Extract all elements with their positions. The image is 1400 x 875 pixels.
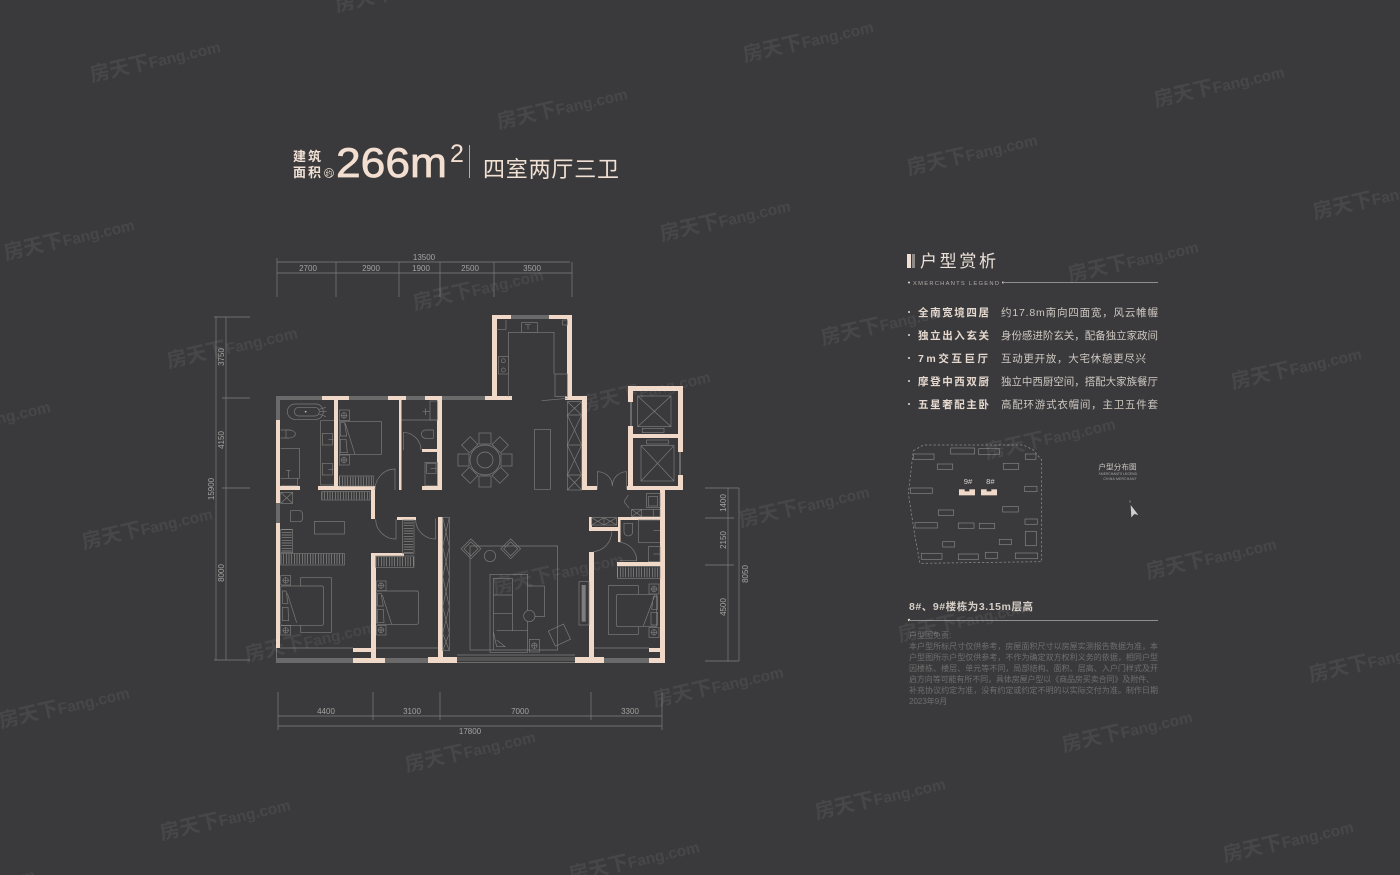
site buildings [910,448,1038,560]
feature list: 互动更开放，大宅休憩更尽兴 [1001,352,1146,365]
highlighted buildings 9# and 8#: 9# [964,477,973,486]
icon: bathtub [287,404,327,419]
dimension lines: left: 15900 [207,477,216,500]
dimension lines: right [705,488,750,661]
dimension lines: bottom: 7000 [511,707,529,716]
feature list: 身份感进阶玄关，配备独立家政间 [1001,329,1158,342]
dimension lines: top: 1900 [412,264,430,273]
watermarks: 房天下Fang.com [243,614,378,667]
watermarks: 房天下Fang.com [983,411,1118,464]
furniture: master bath and north bedroom [281,401,437,500]
dimension lines: right: 4500 [719,598,728,616]
subheading with rule: XMERCHANTS LEGEND [913,281,999,287]
furniture: living room and east suite [461,493,660,652]
dining island [534,429,551,489]
feature list: 摩登中西双厨 [918,375,990,388]
map legend: CHINA MERCHANT [1103,477,1137,481]
map legend: 户型分布图 [1098,461,1137,471]
title: area and layout: 266m [336,139,447,186]
feature list: 全南宽境四居 [918,306,989,319]
highlighted buildings 9# and 8# [959,477,997,495]
site distribution map [908,445,1138,563]
lift shaft [641,440,674,481]
disclaimer: 因楼栋、楼层、单元等不同，局部结构、面积、层高、入户门样式及开 [909,663,1158,673]
disclaimer: 户型图免责: [909,630,951,640]
dimension lines: top: 13500 [413,253,436,262]
entry hall cabinets [592,493,660,525]
watermarks: 房天下Fang.com [658,193,793,246]
dimension lines: right: 1400 [719,494,728,512]
tv console [579,582,589,625]
bed: master bedroom [281,576,331,635]
secondary bath fixtures [402,401,437,486]
dimension lines: top [277,253,572,297]
door swing [593,532,612,552]
title: area and layout: 四室两厅三卫 [483,157,619,182]
disclaimer: 启方向等可能有所不同，具体房屋户型以《商品房买卖合同》及附件、 [909,674,1154,684]
watermarks: 房天下Fang.com [491,546,626,599]
watermarks: 房天下Fang.com [88,34,223,87]
kitchen counters [497,320,567,401]
dimension lines: bottom: 3300 [621,707,639,716]
walls [276,315,683,663]
watermarks: 房天下Fang.com [80,501,215,554]
tall cabinets [567,402,582,490]
wardrobe: east bedroom [617,567,660,578]
feature list: 高配环游式衣帽间，主卫五件套 [1001,398,1158,411]
dimension lines: left [207,317,250,660]
dimension lines: left: 3750 [217,348,226,366]
double vanity [321,421,334,485]
dimension lines: right: 8050 [741,565,750,583]
dimension lines: left: 8000 [217,564,226,582]
feature list: 7m交互巨厅 [918,352,988,365]
sofa set [490,574,544,652]
site boundary [908,445,1042,563]
bed: second bedroom [377,581,418,635]
watermarks: 房天下Fang.com [1066,234,1201,287]
study [281,492,344,534]
armchair [501,539,521,559]
bed: north bedroom [339,410,382,465]
icon: toilet [281,430,295,438]
side table [484,550,496,562]
watermarks: 房天下Fang.com [737,479,872,532]
floor height note: 8#、9#楼栋为3.15m层高 [909,600,1033,613]
dimension lines: top: 2500 [461,264,479,273]
disclaimer [909,630,1158,706]
watermarks: 房天下Fang.com [905,127,1040,180]
watermarks: 房天下Fang.com [165,320,300,373]
entrance double door [597,472,627,489]
wardrobe [322,476,373,500]
dimension lines: bottom: 4400 [317,707,335,716]
lounge chair [548,624,571,646]
armchair [461,539,481,559]
dimension lines: bottom: 17800 [459,727,482,736]
wardrobe: second bedroom [376,520,414,567]
watermarks: 房天下Fang.com [2,212,137,265]
door swings [376,518,436,539]
title: area and layout: 2 [450,140,464,168]
floor plan [276,315,683,663]
watermarks: 房天下Fang.com [651,659,786,712]
watermarks: 房天下Fang.com [1152,59,1287,112]
icon: compass north arrow: N [1129,500,1131,504]
watermarks: 房天下Fang.com [403,724,538,777]
feature list: 约17.8m南向四面宽，风云帷幄 [1001,306,1158,319]
map legend: XMERCHANTS LEGEND [1099,472,1138,476]
east bathroom [619,520,660,562]
feature list [908,306,1158,411]
shower and vanity [281,448,299,486]
dimension lines: bottom [278,692,662,736]
watermarks: 房天下Fang.com [158,792,293,845]
panel: layout analysis [907,252,1158,411]
watermarks: 房天下Fang.com [813,771,948,824]
disclaimer: 户型图所示户型仅供参考，不作为确定双方权利义务的依据，相同户型 [909,652,1158,662]
feature list: 五星奢配主卧 [918,398,990,411]
watermarks: 房天下Fang.com [1229,341,1364,394]
title: area and layout: 约 [326,168,332,178]
furniture: kitchen, island, cabinets and lift core [497,320,674,490]
heading: 户型赏析 [920,252,996,271]
windows and glazing [276,315,681,663]
disclaimer: 2023年9月 [909,696,947,706]
living room cabinet strip [443,517,449,651]
watermarks: 房天下Fang.com [819,297,954,350]
map legend [1098,461,1138,481]
watermarks: 房天下Fang.com [1221,814,1356,867]
disclaimer: 本户型所标尺寸仅供参考，房屋面积尺寸以房屋实测报告数据为准，本 [909,641,1158,651]
watermarks: 房天下Fang.com [578,364,713,417]
feature list: 独立中西厨空间，搭配大家族餐厅 [1001,375,1158,388]
dimension lines: top: 2700 [299,264,317,273]
title: area and layout: 面积 [293,165,321,180]
walk-in wardrobe [281,529,344,565]
lift shaft [638,396,671,433]
feature list: 独立出入玄关 [918,329,990,342]
disclaimer: 补充协议约定为准，没有约定或约定不明的以实际交付为准。制作日期 [909,685,1158,695]
watermarks: 房天下Fang.com [741,14,876,67]
bed: east bedroom [608,584,659,637]
watermarks: 房天下Fang.com [1060,704,1195,757]
dimension lines: left: 4150 [217,431,226,449]
watermarks: 房天下Fang.com [411,262,546,315]
dimension lines: top: 2900 [362,264,380,273]
furniture: dining table [458,433,512,487]
door swing [375,469,395,490]
dimension lines: right: 2150 [719,531,728,549]
watermarks: 房天下Fang.com [0,680,132,733]
watermarks: 房天下Fang.com [495,81,630,134]
icon: heading bars [907,254,915,268]
living room rug [470,546,558,650]
label: building area: 建筑 [293,149,321,164]
watermarks: 房天下Fang.com [896,594,1031,647]
icon: compass north arrow [1129,500,1138,517]
dimension lines: top: 3500 [523,264,541,273]
dimension lines: bottom: 3100 [403,707,421,716]
highlighted buildings 9# and 8#: 8# [986,477,995,486]
title: area and layout [293,139,619,186]
watermarks: 房天下Fang.com [1144,531,1279,584]
furniture: west bedrooms [281,492,449,651]
